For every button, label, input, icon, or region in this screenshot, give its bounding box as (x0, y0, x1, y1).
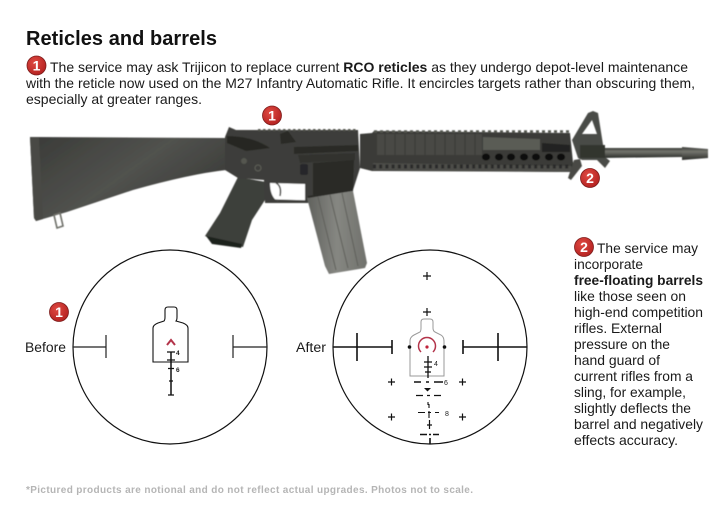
intro text block (25, 56, 695, 107)
after reticle: 8 (445, 411, 449, 418)
silhouette target (410, 319, 444, 376)
top rail teeth (258, 129, 358, 131)
rifle photo illustration (30, 111, 708, 274)
before reticle (73, 250, 267, 444)
marker 2 on rifle: 2 (586, 170, 594, 186)
after reticle: 6 (444, 380, 448, 387)
intro text block: especially at greater ranges. (26, 91, 202, 107)
barrel text block (574, 238, 703, 448)
marker 2 on rifle (580, 168, 600, 188)
marker 1 on rifle (262, 106, 282, 125)
title: Reticles and barrels (26, 28, 217, 50)
label: After: After (296, 340, 327, 355)
sling swivel (54, 213, 63, 228)
marker 1 beside before reticle (50, 302, 68, 322)
badge 2 in text: 2 (580, 239, 588, 255)
badge 2 in text (574, 238, 594, 256)
front sight (572, 111, 610, 168)
intro text block: The service may ask Trijicon to replace current RCO reticles as they undergo depot-level maintenance (50, 59, 688, 75)
barrel text block: sling, for example, (574, 384, 686, 400)
barrel text block: pressure on the (574, 336, 670, 352)
barrel text block: effects accuracy. (574, 432, 678, 448)
red circle dot (418, 337, 435, 352)
marker 1 on rifle: 1 (268, 108, 276, 124)
barrel text block: slightly deflects the (574, 400, 691, 416)
barrel text block: hand guard of (574, 352, 660, 368)
pistol grip (205, 177, 266, 247)
barrel text block: free-floating barrels (574, 272, 703, 288)
before reticle: 4 (176, 350, 180, 357)
flash hider (682, 147, 708, 160)
receiver (225, 127, 360, 203)
barrel text block: incorporate (574, 256, 643, 272)
label: Before: Before (25, 340, 66, 355)
badge 1 in intro (27, 56, 46, 75)
magazine (307, 191, 367, 274)
barrel text block: current rifles from a (574, 368, 693, 384)
barrel text block: The service may (597, 240, 698, 256)
red chevron (167, 340, 175, 345)
after reticle: 4 (434, 361, 438, 368)
marker 1 beside before reticle: 1 (55, 304, 63, 320)
before reticle: 6 (176, 367, 180, 374)
barrel text block: barrel and negatively (574, 416, 703, 432)
barrel text block: high-end competition (574, 304, 703, 320)
intro text block: with the reticle now used on the M27 Infantry Automatic Rifle. It encircles targets rather than obscuring them, (25, 75, 695, 91)
barrel (600, 148, 682, 158)
rifle stock (30, 137, 226, 221)
footnote: *Pictured products are notional and do not reflect actual upgrades. Photos not to scale. (26, 485, 473, 496)
after reticle (333, 250, 527, 444)
barrel text block: rifles. External (574, 320, 662, 336)
badge 1 in intro: 1 (33, 58, 41, 74)
trigger guard opening (270, 183, 305, 201)
handguard (360, 131, 574, 172)
barrel text block: like those seen on (574, 288, 686, 304)
